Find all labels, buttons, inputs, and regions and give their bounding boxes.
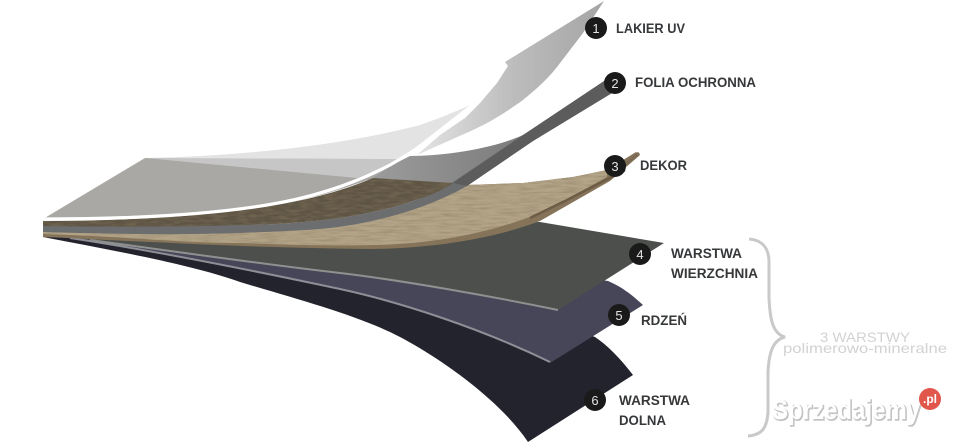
- badge 1: [585, 17, 607, 39]
- badge 5: 5: [615, 308, 623, 323]
- badge 6: [584, 389, 606, 411]
- watermark: sprzedajemy.pl: Sprzedajemy: [772, 394, 920, 425]
- brace: [748, 239, 785, 436]
- layer 2: folia ochronna: [43, 79, 617, 234]
- badge 2: 2: [611, 76, 619, 91]
- raised lacquer end: [417, 1, 604, 155]
- watermark: sprzedajemy.pl: Sprzedajemy: [773, 395, 921, 426]
- label: warstwa dolna: WARSTWA: [619, 393, 690, 408]
- white edge: [43, 100, 480, 219]
- caption: 3 warstwy: 3 WARSTWY: [820, 329, 911, 345]
- badge 4: [629, 243, 651, 265]
- caption: polimerowo-mineralne: polimerowo-mineralne: [783, 340, 947, 356]
- label: lakier UV: LAKIER UV: [616, 21, 685, 36]
- watermark: sprzedajemy.pl: .pl: [923, 392, 937, 406]
- badge 2: [604, 72, 626, 94]
- label: dekor: DEKOR: [640, 158, 687, 173]
- badge 4: 4: [636, 247, 644, 262]
- layer 4: warstwa wierzchnia: [60, 222, 664, 310]
- layer 5: rdzen: [70, 234, 643, 363]
- base sheet: [43, 158, 400, 219]
- badge 3: 3: [611, 159, 619, 174]
- badge 1: 1: [592, 21, 600, 36]
- badge 6: 6: [591, 393, 599, 408]
- label: warstwa dolna: DOLNA: [619, 413, 666, 428]
- label: warstwa wierzchnia: WARSTWA: [671, 246, 742, 261]
- light translucent band: [145, 105, 470, 159]
- layer 6: warstwa dolna: [43, 234, 633, 442]
- label: rdzen: RDZEŃ: [641, 313, 687, 328]
- badge 3: [604, 155, 626, 177]
- label: warstwa wierzchnia: WIERZCHNIA: [671, 266, 758, 281]
- layer 1: lakier UV: [43, 1, 604, 219]
- layer 3: dekor: [43, 152, 640, 249]
- badge 5: [608, 304, 630, 326]
- mid translucent band: [145, 158, 402, 178]
- label: folia ochronna: FOLIA OCHRONNA: [635, 75, 756, 90]
